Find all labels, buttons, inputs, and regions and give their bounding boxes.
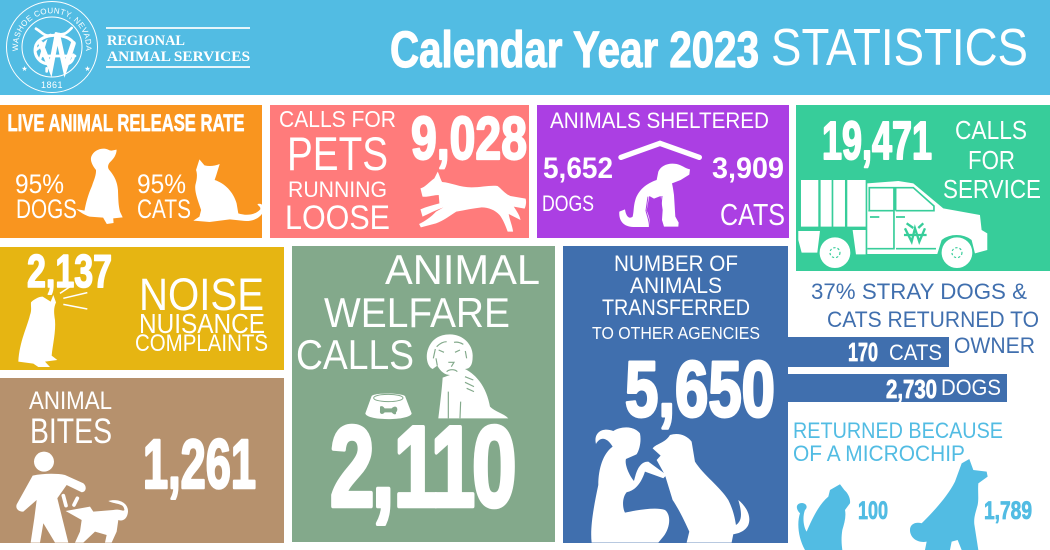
bar: cats returned (788, 337, 949, 367)
cats rate: CATS (137, 194, 191, 224)
panel: animal bites (0, 378, 284, 543)
number 19,471: 19,471 (822, 111, 932, 171)
logo seal: 1861 (41, 80, 63, 90)
icon: barking dog (18, 286, 87, 367)
text: number of animals transferred: TRANSFERRED (602, 295, 750, 320)
text: stray dogs and cats returned (811, 279, 1039, 358)
icon: woman with dog (591, 427, 749, 543)
number 9,028: 9,028 (411, 105, 527, 172)
logo wordmark: REGIONAL (107, 33, 185, 49)
number cats: 3,909 (712, 152, 784, 185)
number dogs: 5,652 (543, 152, 613, 185)
logo seal: WASHOE COUNTY, NEVADA (12, 8, 92, 52)
number 1,261: 1,261 (143, 425, 256, 503)
panel: animal welfare calls (292, 246, 555, 542)
logo seal (6, 1, 98, 93)
text: stray dogs and cats returned: 37% STRAY DOGS & (811, 279, 1027, 304)
text: calls for service (943, 115, 1041, 204)
text: stray dogs and cats returned: OWNER (954, 333, 1035, 358)
text: calls for: CALLS FOR (279, 106, 396, 132)
dogs rate: 95% (15, 169, 64, 199)
panel heading: ANIMALS SHELTERED (550, 108, 769, 133)
text: to other agencies: TO OTHER AGENCIES (592, 323, 760, 343)
icon: running dog (419, 172, 526, 232)
number 2,110: 2,110 (330, 403, 516, 530)
bar: dogs returned: 2,730 (886, 374, 937, 404)
panel: animals transferred (563, 246, 788, 543)
icon: sitting cat (193, 159, 264, 222)
panel heading: LIVE ANIMAL RELEASE RATE (8, 110, 244, 137)
icon: microchip dog (910, 459, 988, 550)
panel: live animal release rate (0, 105, 264, 238)
text: loose: LOOSE (285, 199, 390, 237)
panel: pets running loose (270, 105, 529, 238)
panel: animals sheltered (537, 105, 789, 238)
panel: noise complaints (0, 245, 284, 370)
text: complaints: COMPLAINTS (135, 330, 268, 357)
number 2,137: 2,137 (27, 245, 112, 297)
title: Calendar Year 2023 (390, 21, 759, 78)
text: bites: BITES (30, 412, 112, 451)
panel: calls for service (796, 105, 1050, 271)
cats rate: 95% (137, 169, 186, 199)
text: nuisance: NUISANCE (139, 308, 265, 339)
text: returned because of a microchip: RETURNED BECAUSE (793, 418, 1003, 443)
text: running: RUNNING (288, 177, 387, 202)
bar: dogs returned: DOGS (941, 375, 1001, 400)
icon: food bowl (365, 393, 412, 419)
logo wordmark: ANIMAL SERVICES (107, 49, 250, 65)
number 5,650: 5,650 (625, 344, 775, 433)
bar: cats returned: 170 (848, 337, 878, 367)
text: calls: CALLS (296, 331, 414, 378)
icon: animal control truck (798, 180, 987, 269)
text: calls for service: FOR (968, 145, 1015, 175)
icon: shelter with dog and cat (619, 143, 699, 227)
text: calls for service: CALLS (955, 115, 1027, 145)
cats rate (137, 169, 191, 224)
icon: sitting dog (76, 149, 123, 224)
text: animal: ANIMAL (29, 387, 112, 415)
icon: dog biting person (16, 452, 128, 543)
text: welfare: WELFARE (324, 289, 510, 336)
text: returned because of a microchip: OF A MICROCHIP (793, 441, 965, 466)
icon: sad thin dog (427, 334, 508, 418)
logo seal: ★ (21, 65, 28, 73)
text: number of animals transferred: ANIMALS (630, 273, 722, 298)
dogs rate: DOGS (16, 194, 77, 224)
bar: dogs returned (788, 374, 1007, 404)
icon: microchip cat (797, 484, 850, 550)
logo wordmark (106, 27, 250, 68)
text: stray dogs and cats returned: CATS RETURNED TO (827, 307, 1039, 332)
logo seal: ★ (84, 65, 91, 73)
label cats: CATS (720, 197, 785, 232)
header band (0, 0, 1050, 95)
text: noise: NOISE (139, 269, 264, 320)
text: returned because of a microchip (793, 418, 1003, 466)
text: number of animals transferred: NUMBER OF (614, 251, 738, 276)
text: number of animals transferred (602, 251, 750, 320)
label dogs: DOGS (542, 191, 594, 216)
bar: cats returned: CATS (889, 340, 942, 365)
dogs rate (15, 169, 77, 224)
text: animal: ANIMAL (385, 246, 540, 293)
number 1,789: 1,789 (984, 497, 1032, 525)
number 100: 100 (858, 497, 888, 525)
text: pets: PETS (287, 127, 388, 180)
